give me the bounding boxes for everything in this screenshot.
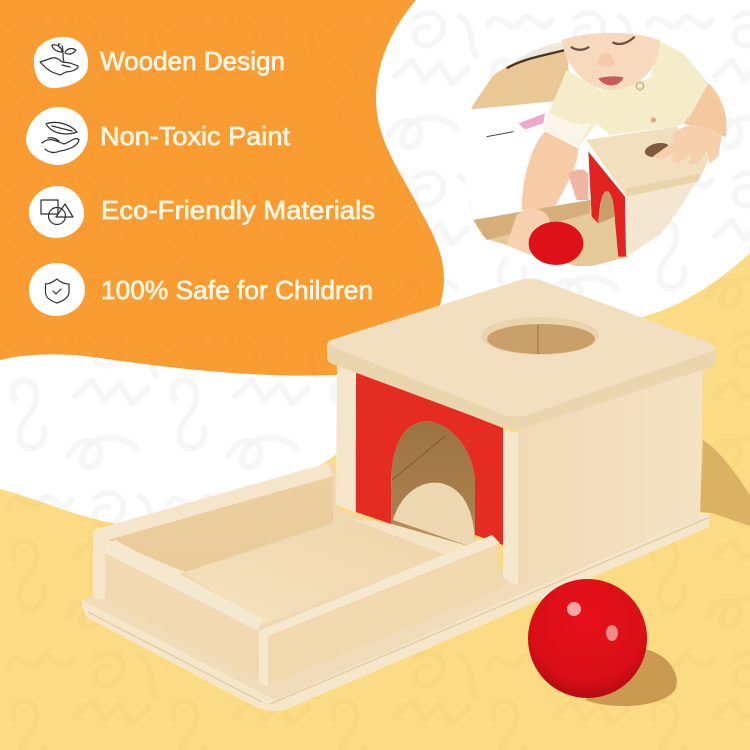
tray backing	[93, 463, 518, 690]
photo: baby playing with the box	[464, 32, 727, 266]
label: Eco-Friendly Materials: Eco-Friendly Materials	[101, 195, 375, 225]
shadow: box cast shadow	[700, 440, 750, 526]
label: 100% Safe for Children: 100% Safe for Children	[101, 275, 373, 305]
product in photo: red front	[588, 152, 626, 257]
shadow: ball shadow	[585, 648, 677, 706]
tray: floor	[185, 520, 445, 625]
product in photo: box side	[627, 182, 698, 257]
photo background: blanket	[464, 60, 726, 258]
background: yellow squiggle texture	[0, 253, 750, 750]
tray: back wall	[93, 463, 333, 600]
box: red front panel with arch	[356, 370, 503, 548]
baby: foot	[568, 169, 588, 200]
box: right side face	[517, 368, 703, 586]
box: lid	[327, 278, 715, 430]
tray: left front wall	[105, 540, 263, 678]
baby: hand on ball	[507, 209, 550, 255]
arch interior	[391, 421, 475, 548]
icon: hand with sprout	[34, 37, 88, 88]
icon: shield with check	[29, 263, 85, 316]
baby: left arm	[522, 132, 578, 213]
feature: non-toxic paint	[26, 107, 291, 165]
tray base	[82, 513, 709, 711]
product: wooden box with tray and ball	[82, 278, 750, 711]
icon: leaf over hand	[26, 107, 88, 165]
feature: safe for children	[29, 263, 373, 316]
product in photo: tray	[473, 200, 628, 268]
panel: orange feature blob	[0, 0, 444, 376]
lid hole	[481, 317, 599, 355]
background: yellow lower wave	[0, 253, 750, 750]
photo background: wooden floor	[470, 50, 572, 109]
red ball	[528, 579, 647, 698]
baby: right arm	[683, 82, 727, 137]
label: Wooden Design: Wooden Design	[100, 46, 285, 76]
baby: head	[562, 30, 661, 90]
ball in photo	[529, 222, 583, 265]
box: rear post	[336, 362, 355, 512]
feature: eco-friendly materials	[29, 186, 375, 238]
label: Non-Toxic Paint: Non-Toxic Paint	[100, 121, 291, 151]
baby: hand on lid	[653, 125, 722, 165]
icon: square, circle, triangle	[29, 186, 84, 238]
product in photo: lid	[586, 127, 710, 197]
baby: shirt	[543, 42, 708, 147]
tray: right front wall	[259, 535, 500, 686]
feature: wooden design	[34, 37, 285, 88]
box: front corner post	[503, 430, 518, 586]
